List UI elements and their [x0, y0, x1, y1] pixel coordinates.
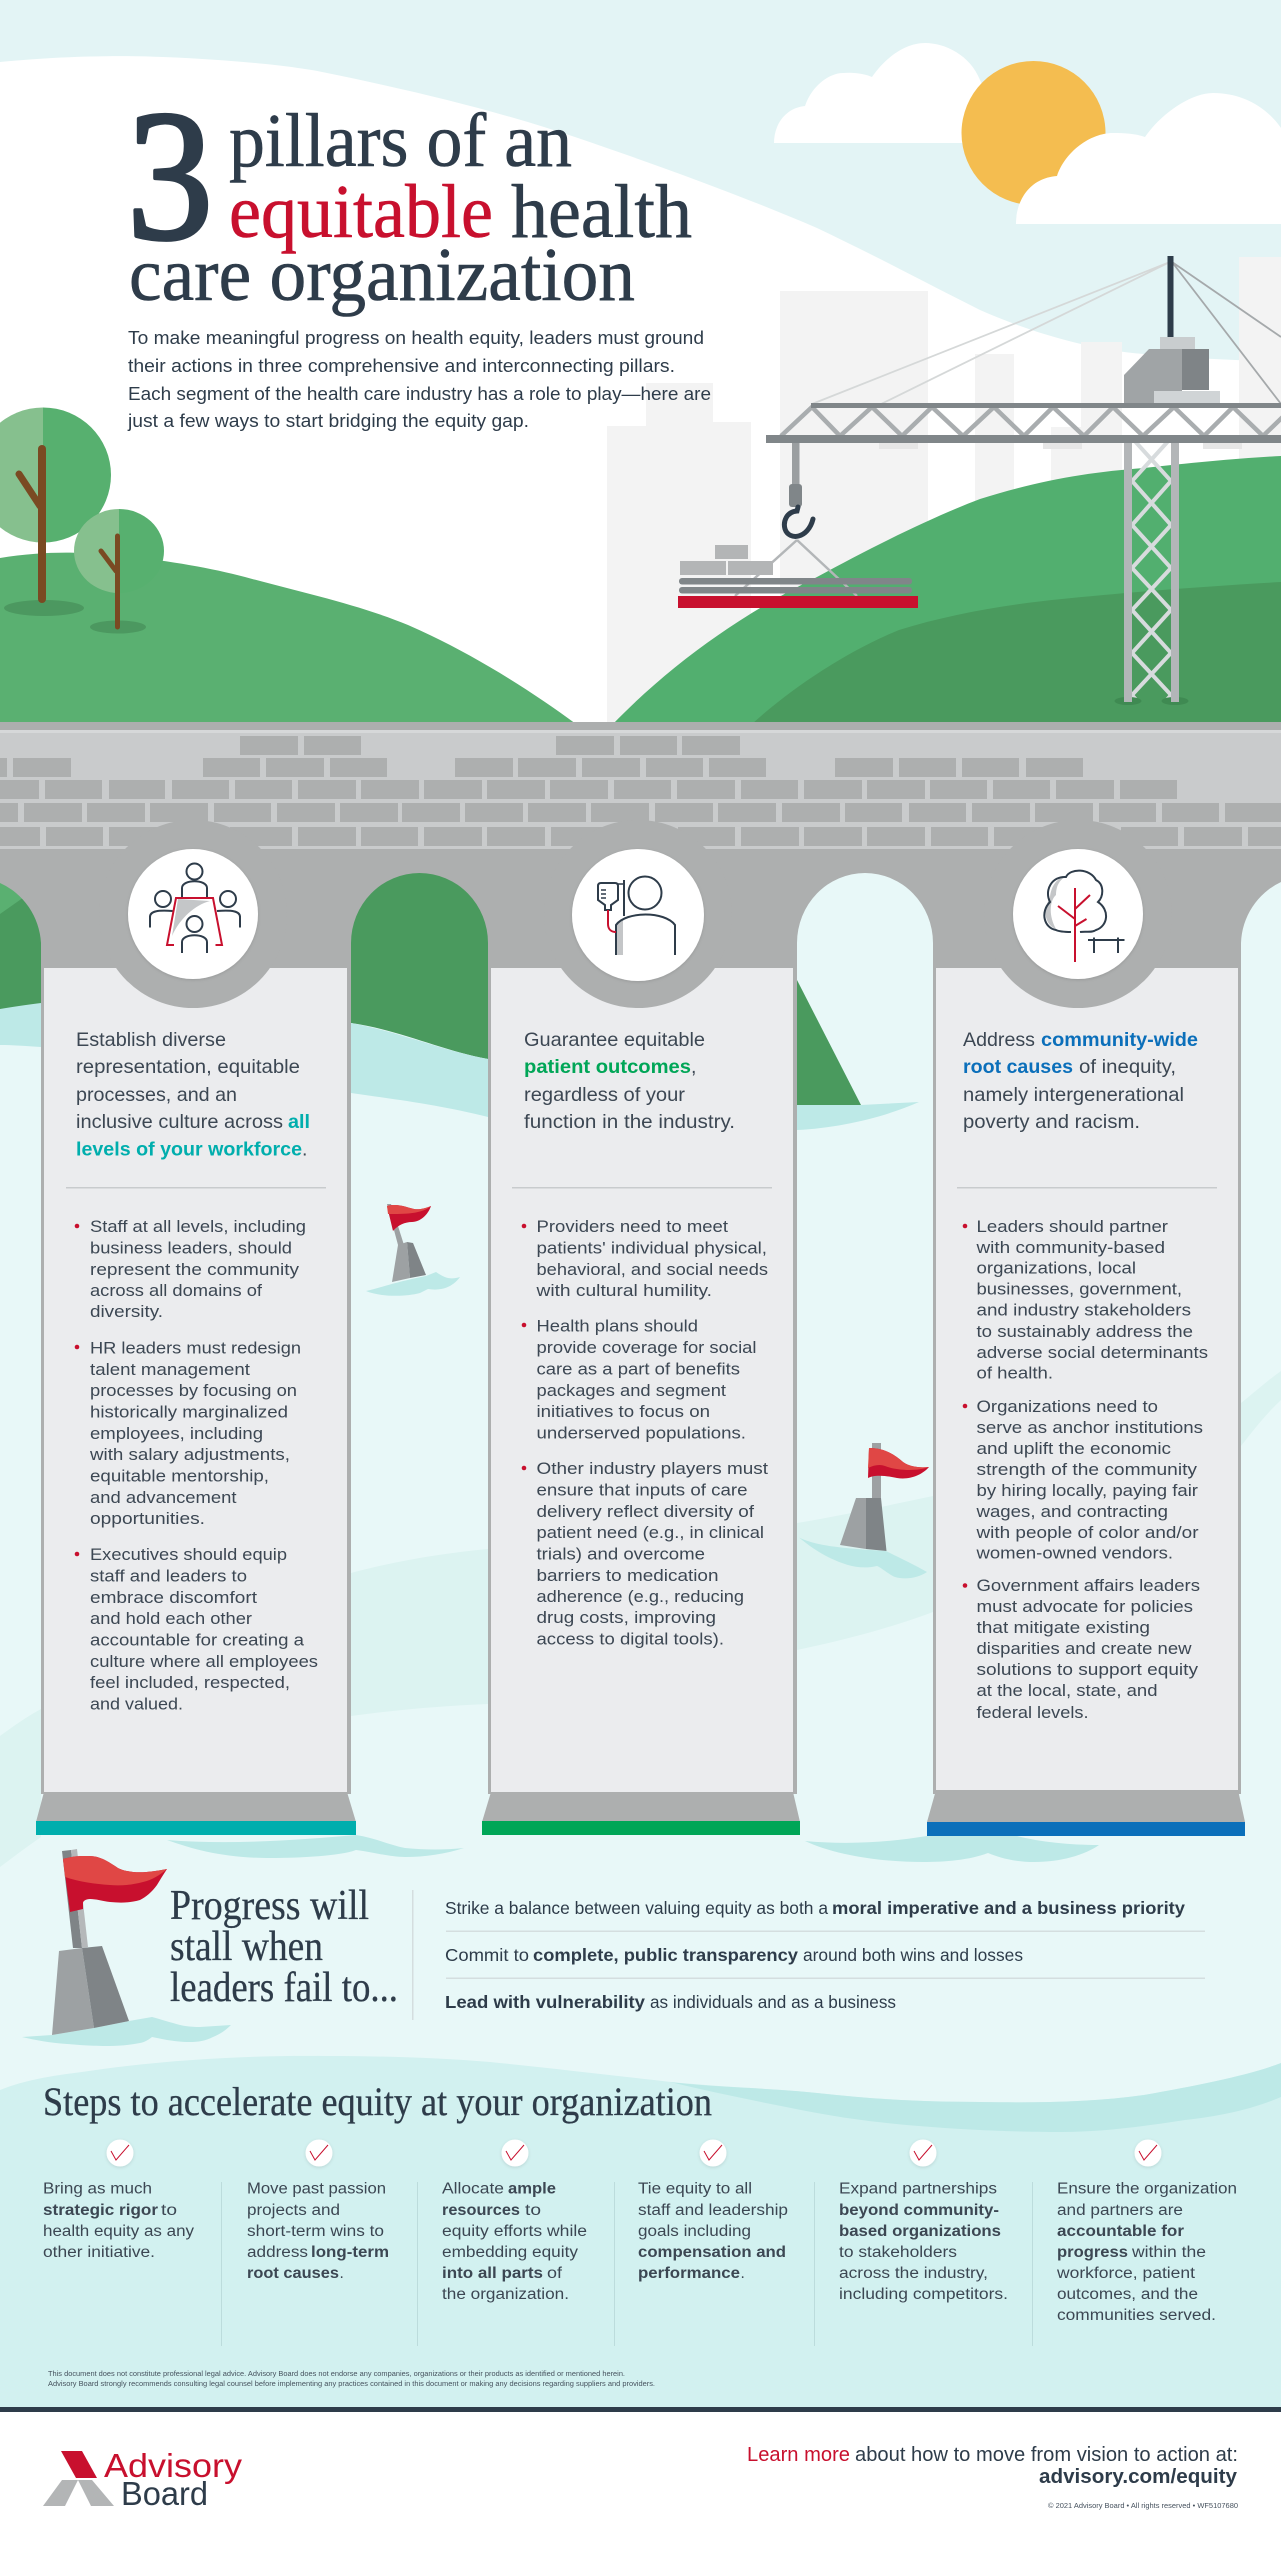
step 5: to stakeholders: [839, 2244, 957, 2261]
pillar 1 bullets: business leaders, should: [90, 1238, 292, 1258]
step 6: communities served.: [1057, 2307, 1216, 2324]
pillar 2 bullets: behavioral, and social needs: [536, 1260, 768, 1279]
pillar 3 bullets: federal levels.: [976, 1703, 1088, 1722]
step 2: root causes: [247, 2265, 339, 2282]
crane mast: [1168, 256, 1174, 337]
pillar 3 bullets: serve as anchor institutions: [976, 1418, 1203, 1437]
pillar 1 bullets: diversity.: [90, 1302, 163, 1321]
pillar 3 bullets: businesses, government,: [976, 1280, 1182, 1298]
panel: pillar 2: [482, 820, 800, 1835]
pillar 2 lead text: Guarantee equitable: [524, 1029, 705, 1051]
step 5: beyond community-: [839, 2202, 999, 2219]
callout list: what leaders fail to do: complete, public transparency: [533, 1945, 798, 1965]
tree: large: [0, 408, 111, 616]
pillar 3 bullets: by hiring locally, paying fair: [976, 1481, 1198, 1500]
pillar 3 bullets: strength of the community: [976, 1460, 1198, 1479]
pillar 1 bullets: accountable for creating a: [90, 1630, 305, 1650]
pillar 2 bullets: access to digital tools).: [536, 1630, 724, 1648]
steps heading: Steps to accelerate equity at your organization: [43, 2079, 712, 2124]
step 2: [247, 2180, 389, 2282]
pillar 1 bullets: talent management: [90, 1360, 250, 1379]
step 4: goals including: [638, 2223, 751, 2240]
pillar 2 bullets: ensure that inputs of care: [536, 1480, 748, 1500]
title: [127, 73, 692, 317]
crane tower: [1114, 438, 1188, 705]
pillar 3 bullets: to sustainably address the: [976, 1322, 1193, 1341]
icon: people around a table: [150, 864, 240, 953]
icon: sun: [962, 61, 1106, 205]
pillar 3 bullets: Leaders should partner: [976, 1217, 1168, 1236]
call to action: Learn more: [747, 2444, 850, 2466]
pillar 2 bullets: underserved populations.: [536, 1424, 746, 1442]
pillar 3 bullets: women-owned vendors.: [975, 1544, 1173, 1562]
title: care organization: [129, 233, 635, 317]
pillar 3 bullets: solutions to support equity: [976, 1660, 1199, 1679]
callout list: what leaders fail to do: Commit to: [445, 1945, 529, 1965]
step 4: compensation and: [638, 2244, 786, 2261]
step 1: other initiative.: [43, 2244, 155, 2261]
pillar 3 bullets: of health.: [976, 1364, 1053, 1382]
pillar 3 bullets: adverse social determinants: [976, 1343, 1208, 1362]
pillar 1 lead text: levels of your workforce: [76, 1138, 302, 1160]
title: health: [511, 170, 692, 254]
pillar 2 bullets: with cultural humility.: [535, 1281, 712, 1300]
pillar 1 bullets: feel included, respected,: [90, 1673, 290, 1692]
call to action: about how to move from vision to action at:: [855, 2444, 1238, 2466]
pillar 3 bullets: with community-based: [975, 1238, 1165, 1257]
step 3: embedding equity: [442, 2244, 578, 2261]
panel: pillar 1: [36, 820, 356, 1835]
step 3: resources: [442, 2202, 520, 2219]
callout list: what leaders fail to do: around both wins and losses: [803, 1945, 1023, 1965]
pillar 2 bullets: patient need (e.g., in clinical: [536, 1523, 764, 1542]
icon: tree with fence: [1044, 871, 1124, 962]
call to action: [747, 2444, 1238, 2488]
pillar 2 lead text: [524, 1029, 735, 1133]
pillar 3 lead text: Address: [963, 1029, 1035, 1051]
pillar 2 bullets: Other industry players must: [536, 1459, 768, 1478]
pillar 1 bullets: opportunities.: [90, 1509, 205, 1528]
pillar 2 bullets: barriers to medication: [536, 1566, 718, 1585]
logo: Advisory Board: [43, 2447, 243, 2512]
step 5: including competitors.: [839, 2286, 1008, 2303]
pillar 1 bullets: Executives should equip: [90, 1545, 287, 1564]
step 1: health equity as any: [43, 2223, 194, 2240]
crane cab: [1124, 337, 1220, 403]
callout heading: progress will stall: stall when: [170, 1924, 323, 1970]
step 3: equity efforts while: [442, 2223, 587, 2240]
step 4: staff and leadership: [638, 2202, 788, 2219]
pillar 1 bullets: staff and leaders to: [90, 1566, 247, 1586]
call to action: advisory.com/equity: [1039, 2466, 1238, 2488]
pillar 1 bullets: equitable mentorship,: [90, 1466, 269, 1486]
pillar 3 bullets: that mitigate existing: [976, 1618, 1150, 1637]
step 3: [442, 2180, 587, 2303]
step 2: Move past passion: [247, 2180, 386, 2198]
step 6: outcomes, and the: [1057, 2286, 1198, 2303]
step 3: of: [547, 2265, 563, 2282]
step 1: strategic rigor: [43, 2202, 158, 2219]
pillar 3 bullets: and uplift the economic: [976, 1439, 1172, 1458]
icon: left cloud: [774, 43, 1000, 143]
callout heading: progress will stall: leaders fail to...: [170, 1965, 398, 2011]
pillar 2 bullets: Health plans should: [536, 1316, 698, 1336]
step 5: Expand partnerships: [839, 2180, 997, 2198]
pillar 3 bullets: [963, 1217, 1208, 1722]
step 5: across the industry,: [839, 2265, 988, 2282]
step 2: .: [340, 2265, 344, 2282]
pillar 2 bullets: patients' individual physical,: [536, 1238, 767, 1258]
left green hill: [0, 553, 576, 724]
step 2: short-term wins to: [247, 2223, 384, 2240]
bridge arches: [0, 849, 1281, 975]
pillar 1 bullets: represent the community: [90, 1260, 300, 1279]
pillar 1 lead text: all: [288, 1111, 310, 1133]
intro paragraph: just a few ways to start bridging the equity gap.: [127, 411, 529, 431]
pillar 2 bullets: care as a part of benefits: [536, 1360, 740, 1378]
wave under pillar 3: [805, 1836, 1099, 1862]
step 6: accountable for: [1057, 2223, 1184, 2240]
panel: pillar 3: [927, 820, 1245, 1836]
step 4: .: [740, 2265, 745, 2282]
step 6: Ensure the organization: [1057, 2180, 1237, 2198]
step 5: [839, 2180, 1008, 2303]
pillar 3 lead text: poverty and racism.: [963, 1111, 1140, 1133]
pillar 1 bullets: historically marginalized: [90, 1402, 288, 1422]
bridge deck and brick wall: [0, 722, 1281, 849]
pillar 3 lead text: [963, 1029, 1198, 1133]
pillar 2 lead text: function in the industry.: [524, 1111, 735, 1133]
pillar 3 lead text: of inequity,: [1079, 1056, 1176, 1078]
pillar 3 bullets: and industry stakeholders: [976, 1300, 1191, 1320]
callout list: what leaders fail to do: Lead with vulnerability: [445, 1992, 645, 2012]
step 3: to: [525, 2202, 541, 2219]
step 6: within the: [1131, 2244, 1206, 2261]
step 2: projects and: [247, 2202, 340, 2219]
step 4: performance: [638, 2265, 740, 2282]
steps band background: [0, 2056, 1281, 2407]
callout heading: progress will stall: Progress will: [170, 1883, 369, 1929]
tree: small: [74, 509, 164, 634]
pillar 2 bullets: Providers need to meet: [536, 1217, 728, 1236]
icon: large flag buoy: [22, 1849, 231, 2046]
pillar 1 bullets: Staff at all levels, including: [90, 1217, 306, 1236]
intro paragraph: Each segment of the health care industry has a role to play—here are: [128, 384, 711, 404]
pillar 3 lead text: root causes: [963, 1056, 1073, 1078]
legal disclaimer: This document does not constitute professional legal advice. Advisory Board does not endorse any companies, organizations or their products as identified or mentioned herein.: [48, 2371, 625, 2378]
pillar 2 bullets: provide coverage for social: [536, 1338, 756, 1357]
pillar 3 lead text: community-wide: [1041, 1029, 1198, 1051]
step 6: [1056, 2180, 1237, 2324]
step 5: based organizations: [839, 2223, 1001, 2240]
pillar 1 bullets: employees, including: [90, 1424, 263, 1443]
pillar 1 bullets: and valued.: [90, 1694, 183, 1714]
step 1: Bring as much: [43, 2180, 152, 2198]
pillar 3 bullets: disparities and create new: [976, 1639, 1192, 1658]
intro paragraph: [127, 328, 711, 431]
step 4: [638, 2180, 788, 2282]
step 6: and partners are: [1057, 2202, 1183, 2219]
crane load: bricks and beam: [678, 545, 918, 608]
step 4: Tie equity to all: [638, 2180, 752, 2198]
step 1: [43, 2180, 194, 2261]
pillar 1 bullets: [75, 1217, 318, 1714]
callout heading: progress will stall: [170, 1883, 398, 2011]
pillar 1 bullets: and advancement: [90, 1488, 237, 1507]
crane hook and cable: [735, 443, 857, 596]
pillar 1 bullets: culture where all employees: [90, 1652, 318, 1671]
pillar 2 bullets: adherence (e.g., reducing: [536, 1587, 744, 1606]
pillar 3 bullets: Organizations need to: [976, 1397, 1158, 1416]
pillar 1 bullets: and hold each other: [90, 1609, 252, 1628]
pillar 1 lead text: representation, equitable: [76, 1056, 300, 1078]
pillar 3 bullets: Government affairs leaders: [976, 1576, 1200, 1595]
pillar 1 lead text: processes, and an: [76, 1084, 237, 1106]
intro paragraph: their actions in three comprehensive and interconnecting pillars.: [128, 356, 675, 376]
icon: right cloud: [1016, 93, 1281, 224]
icon: patient with IV drip: [598, 876, 675, 955]
icon: small flag buoy between pillars 1 and 2: [366, 1204, 460, 1296]
copyright: © 2021 Advisory Board • All rights reserved • WF5107680: [1048, 2501, 1238, 2510]
pillar 2 lead text: ,: [691, 1056, 696, 1078]
right green hill: [613, 456, 1281, 724]
pillar 1 bullets: processes by focusing on: [90, 1381, 297, 1400]
city buildings: [607, 257, 1281, 731]
pillar 2 bullets: initiatives to focus on: [536, 1402, 710, 1421]
step 3: the organization.: [442, 2286, 569, 2303]
step check icons: [106, 2140, 1162, 2166]
pillar 3 bullets: must advocate for policies: [976, 1597, 1193, 1616]
crane: [678, 256, 1281, 705]
title: 3: [127, 73, 213, 279]
callout list: what leaders fail to do: moral imperative and a business priority: [832, 1898, 1185, 1918]
wave under pillar 1: [167, 1835, 464, 1858]
step 6: progress: [1057, 2244, 1128, 2261]
pillar 1 bullets: HR leaders must redesign: [90, 1338, 301, 1358]
step 2: address: [247, 2244, 308, 2261]
pillar 3 bullets: with people of color and/or: [975, 1523, 1199, 1542]
pillar 2 bullets: delivery reflect diversity of: [536, 1502, 754, 1521]
logo: Advisory Board: Board: [121, 2475, 208, 2512]
pillar 2 lead text: regardless of your: [524, 1084, 686, 1106]
pillar 3 bullets: wages, and contracting: [975, 1502, 1168, 1521]
logo: Advisory Board: Advisory: [104, 2447, 243, 2484]
callout list: what leaders fail to do: Strike a balance between valuing equity as both a: [445, 1898, 828, 1918]
pillar 1 lead text: inclusive culture across: [76, 1111, 283, 1133]
pillar 1 lead text: [76, 1029, 310, 1160]
step 1: to: [161, 2202, 177, 2219]
pillar 3 bullets: at the local, state, and: [976, 1681, 1158, 1700]
pillar 1 lead text: .: [302, 1138, 307, 1160]
water and scenery seen through arches: [0, 849, 1281, 2407]
pillar 3 bullets: organizations, local: [976, 1258, 1136, 1278]
pillar 2 lead text: patient outcomes: [524, 1056, 691, 1078]
crane jib truss: [766, 403, 1281, 449]
pillar 1 lead text: Establish diverse: [76, 1029, 226, 1051]
crane cables: [812, 262, 1281, 404]
title: pillars of an: [229, 99, 572, 183]
pillar 2 bullets: trials) and overcome: [536, 1544, 705, 1564]
title: equitable: [229, 170, 493, 254]
pillar 3 lead text: namely intergenerational: [963, 1084, 1184, 1106]
callout list: what leaders fail to do: as individuals and as a business: [650, 1992, 896, 2012]
step 3: into all parts: [442, 2265, 543, 2282]
pillar 1 bullets: with salary adjustments,: [89, 1445, 290, 1464]
legal disclaimer: [48, 2371, 655, 2388]
step 6: workforce, patient: [1056, 2265, 1196, 2282]
step 3: ample: [508, 2180, 556, 2198]
pillar 2 bullets: [522, 1217, 768, 1648]
callout list: what leaders fail to do: [445, 1898, 1205, 2012]
pillar 2 bullets: drug costs, improving: [536, 1608, 716, 1627]
step 3: Allocate: [442, 2180, 504, 2198]
legal disclaimer: Advisory Board strongly recommends consulting legal counsel before implementing any practices contained in this document or making any decisions regarding suppliers and providers.: [48, 2381, 655, 2388]
step 2: long-term: [311, 2244, 389, 2261]
pillar 1 bullets: across all domains of: [90, 1281, 262, 1300]
intro paragraph: To make meaningful progress on health equity, leaders must ground: [128, 328, 704, 348]
icon: small flag buoy between pillars 2 and 3: [799, 1443, 929, 1578]
sky background: [0, 0, 1281, 361]
pillar 1 bullets: embrace discomfort: [90, 1588, 257, 1607]
pillar 2 bullets: packages and segment: [536, 1381, 726, 1400]
